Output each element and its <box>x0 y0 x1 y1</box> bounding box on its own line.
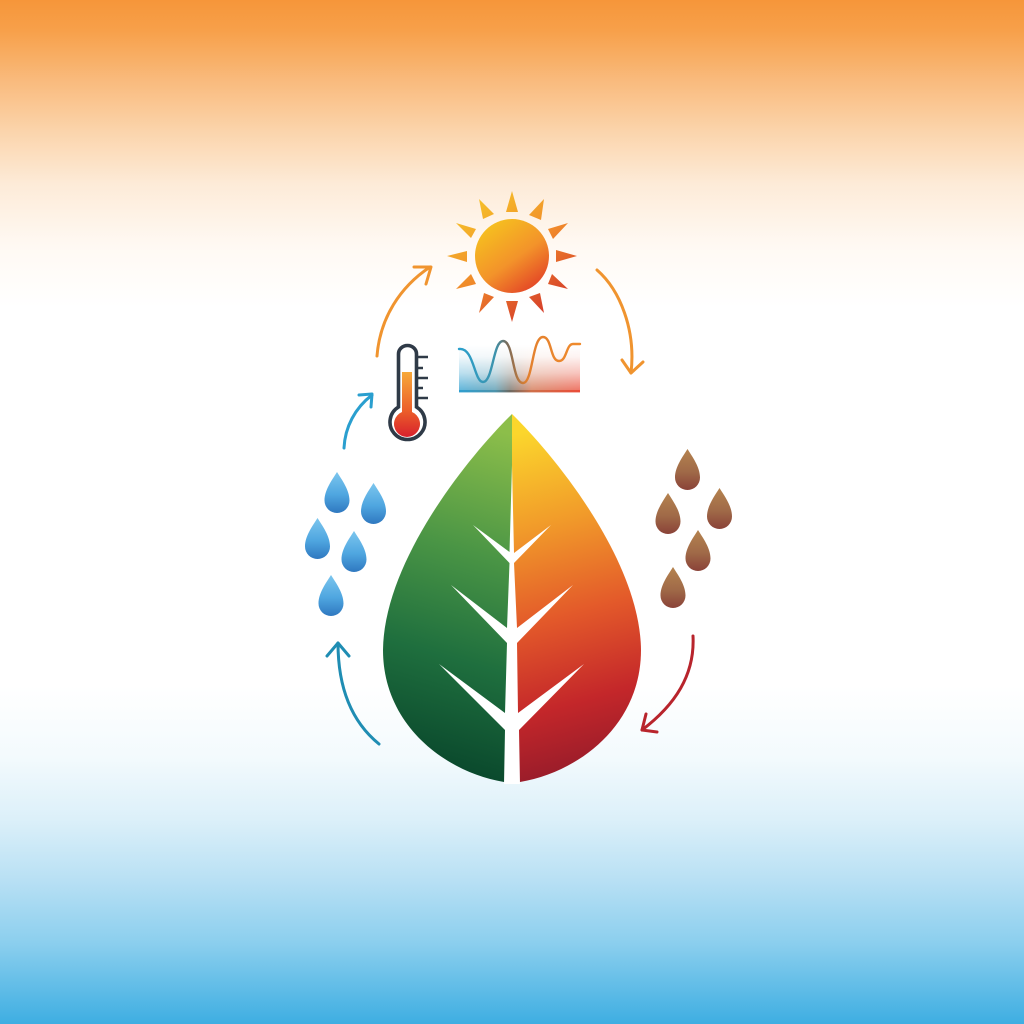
arrow: teal up to drops <box>327 643 379 744</box>
icon: sun <box>447 191 577 322</box>
brown drops <box>656 449 732 608</box>
arrow: red down to leaf <box>642 636 693 732</box>
leaf veins <box>439 465 584 784</box>
arrow: thermometer to sun <box>377 267 431 356</box>
wave chart <box>459 337 580 392</box>
leaf <box>383 414 641 784</box>
arrow: sun to chart side <box>597 270 643 373</box>
blue water drops <box>305 472 386 616</box>
arrow: blue up to thermometer <box>344 394 372 448</box>
icon: thermometer <box>390 346 428 440</box>
